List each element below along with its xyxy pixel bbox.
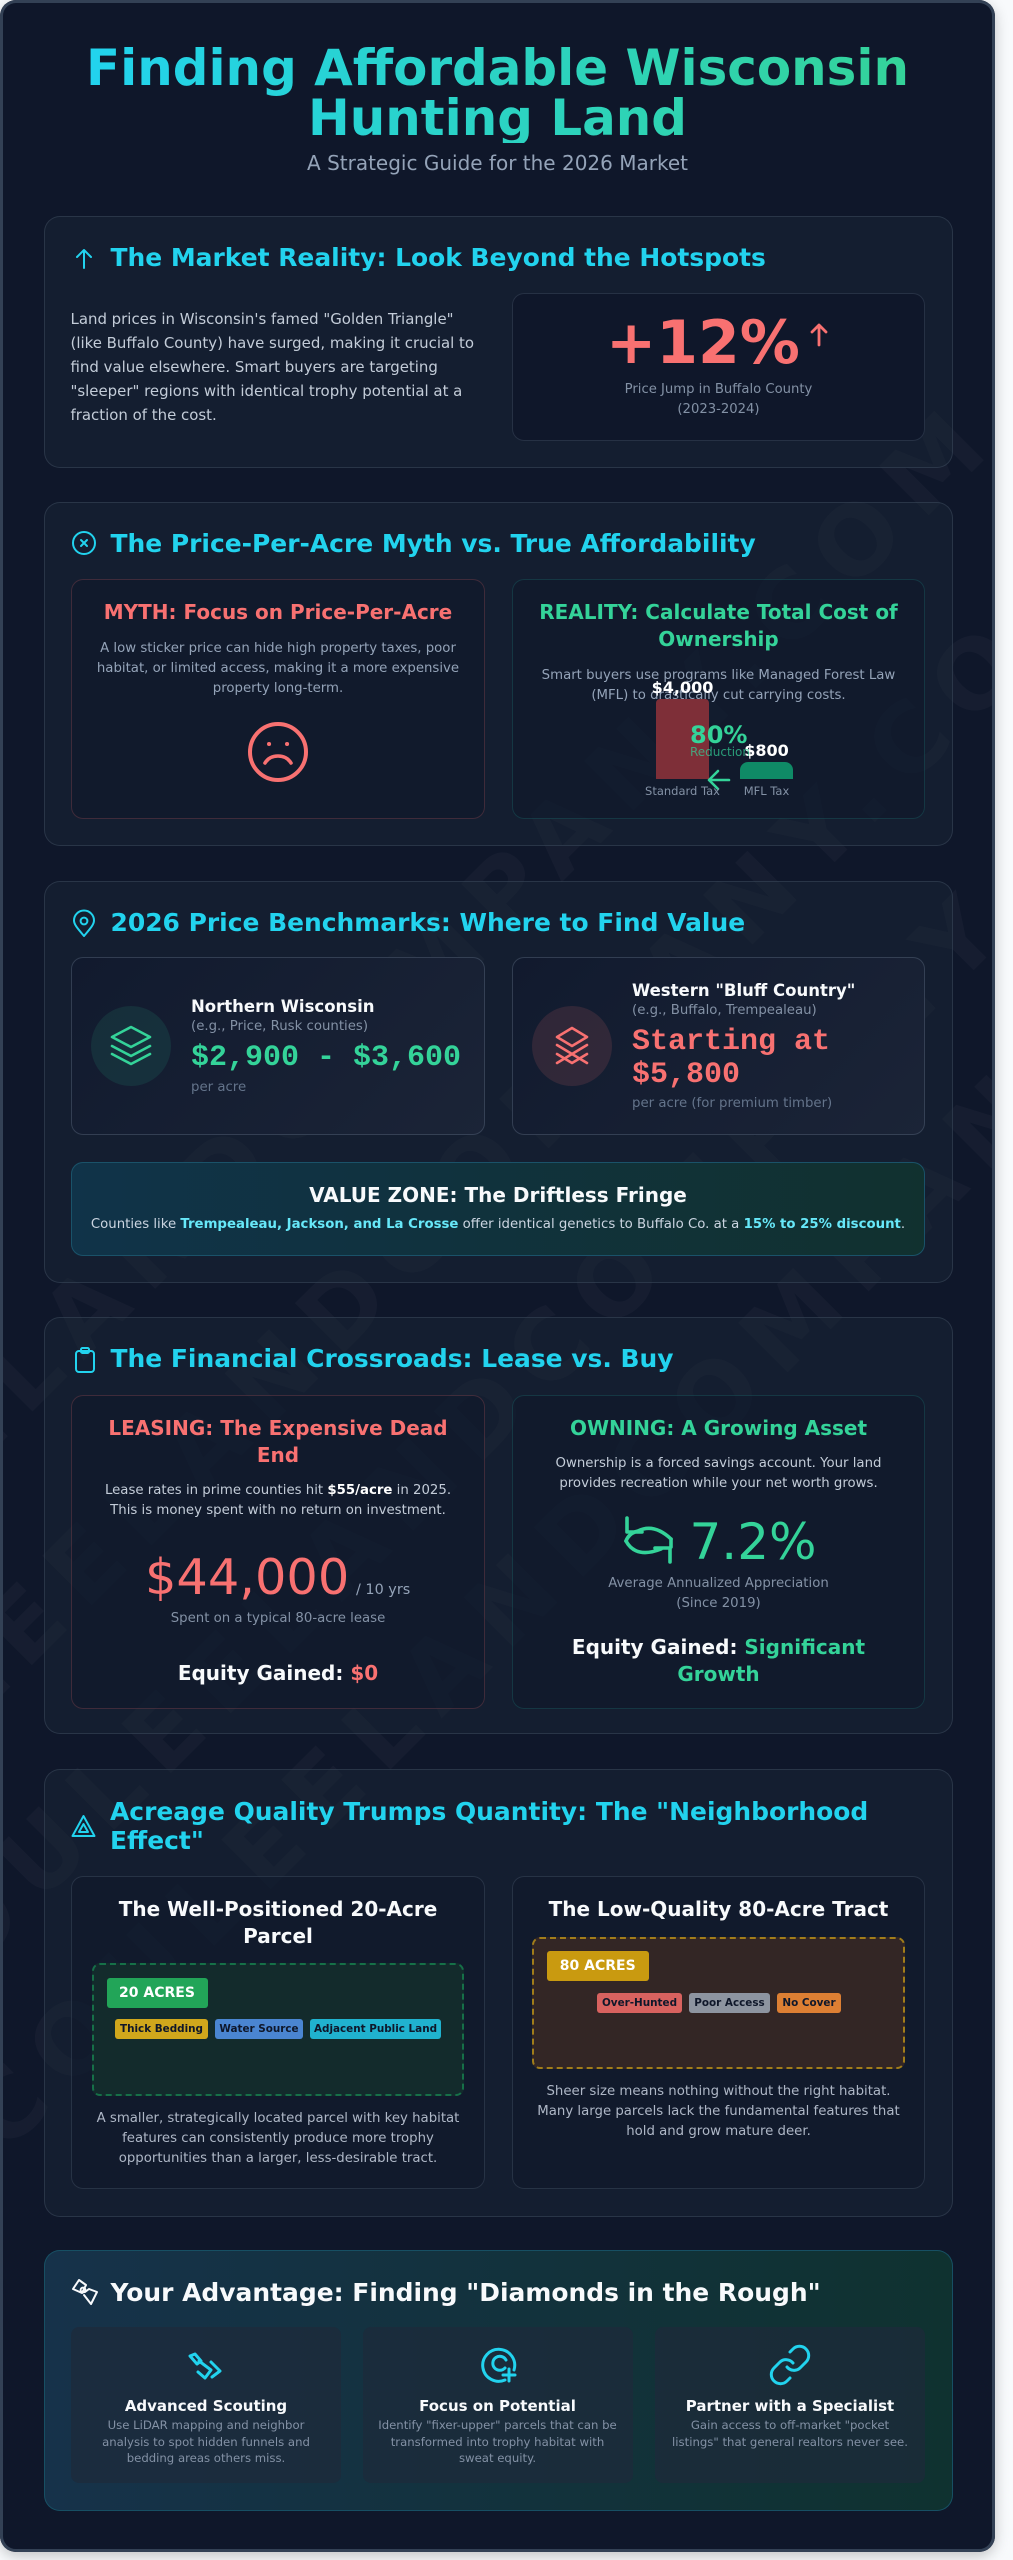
owning text: provides recreation while your net worth grows.	[559, 1476, 878, 1491]
myth text: habitat, or limited access, making it a more expensive	[97, 661, 459, 676]
stat card	[512, 293, 925, 441]
label: 4000: $4,000	[652, 678, 713, 697]
card title: Advanced Scouting	[125, 2397, 287, 2415]
card heading	[118, 1897, 437, 1948]
leasing heading	[108, 1416, 448, 1467]
icon: circle x	[72, 531, 96, 555]
icon: layers	[110, 1026, 152, 1066]
icon: clipboard	[75, 1347, 95, 1373]
lease note: Spent on a typical 80-acre lease	[171, 1611, 385, 1626]
card: owning	[512, 1395, 925, 1709]
card: myth	[71, 579, 485, 819]
card heading: Parcel	[243, 1924, 313, 1948]
appreciation label	[608, 1576, 829, 1611]
lease cost: $44,000	[145, 1548, 349, 1606]
icon: target plus	[481, 2348, 516, 2383]
tract map	[532, 1937, 905, 2069]
card text: Many large parcels lack the fundamental features that	[537, 2104, 900, 2119]
card text	[537, 2084, 900, 2139]
reality heading: Ownership	[658, 627, 779, 651]
card text: analysis to spot hidden funnels and	[102, 2435, 310, 2449]
stat label: (2023-2024)	[677, 402, 760, 417]
card text: Gain access to off-market "pocket	[691, 2418, 889, 2432]
feature tag: Adjacent Public Land	[314, 2023, 437, 2035]
leasing heading: End	[257, 1443, 299, 1467]
owning heading: OWNING: A Growing Asset	[570, 1416, 867, 1440]
parcel map	[92, 1963, 464, 2096]
feature tag: Poor Access	[694, 1997, 765, 2009]
feature tag: Thick Bedding	[120, 2023, 203, 2035]
icon: frown	[248, 722, 308, 782]
body text	[70, 310, 474, 424]
appreciation rate: 7.2%	[690, 1513, 817, 1571]
body text: (like Buffalo County) have surged, making it crucial to	[70, 334, 474, 352]
equity line	[572, 1635, 865, 1686]
equity line: Growth	[677, 1662, 760, 1686]
heading: The Financial Crossroads: Lease vs. Buy	[110, 1344, 674, 1372]
stat label: Price Jump in Buffalo County	[625, 382, 812, 397]
subtitle: A Strategic Guide for the 2026 Market	[307, 151, 688, 175]
reality text: Smart buyers use programs like Managed Forest Law	[542, 668, 895, 683]
card text: Use LiDAR mapping and neighbor	[108, 2418, 304, 2432]
acres tag	[106, 1978, 208, 2008]
equity line: Equity Gained: Significant	[572, 1635, 865, 1659]
acres tag: 20 ACRES	[119, 1985, 195, 2001]
card text: features can consistently produce more trophy	[122, 2131, 434, 2146]
reality text: (MFL) to drastically cut carrying costs.	[591, 688, 846, 703]
card text: sweat equity.	[459, 2451, 536, 2465]
card text: transformed into trophy habitat with	[391, 2435, 604, 2449]
icon: arrow up red	[810, 324, 828, 346]
heading: The Price-Per-Acre Myth vs. True Affordability	[110, 528, 756, 558]
stat value: +12%	[606, 308, 800, 378]
per acre: per acre	[191, 1080, 246, 1095]
heading: Acreage Quality Trumps Quantity: The "Neighborhood	[110, 1796, 868, 1826]
region name: Western "Bluff Country"	[632, 981, 855, 1000]
card title: Partner with a Specialist	[686, 2397, 894, 2415]
feature tag: Water Source	[219, 2023, 299, 2035]
stat label	[625, 382, 812, 417]
icon: layers crossed	[556, 1026, 588, 1064]
card text: bedding areas others miss.	[127, 2451, 285, 2465]
price: $2,900 - $3,600	[191, 1041, 461, 1075]
card text: opportunities than a larger, less-desirable tract.	[119, 2151, 437, 2166]
feature tag: No Cover	[782, 1997, 836, 2009]
leasing heading: LEASING: The Expensive Dead	[108, 1416, 448, 1440]
card text: listings" that general realtors never see.	[672, 2435, 908, 2449]
reality heading	[539, 600, 898, 651]
heading	[110, 1796, 868, 1855]
leasing text: This is money spent with no return on investment.	[110, 1503, 446, 1518]
card: reality	[512, 579, 925, 819]
myth heading: MYTH: Focus on Price-Per-Acre	[104, 600, 452, 624]
panel: market reality	[44, 216, 953, 468]
body text: "sleeper" regions with identical trophy potential at a	[70, 382, 462, 400]
lease duration: / 10 yrs	[356, 1582, 410, 1598]
icon: link	[770, 2344, 810, 2386]
icon: triangle	[72, 1815, 96, 1837]
value zone title: VALUE ZONE: The Driftless Fringe	[309, 1183, 687, 1207]
price: $5,800	[632, 1058, 740, 1092]
equity line: Equity Gained: $0	[178, 1661, 378, 1685]
feature tag	[215, 2019, 303, 2039]
myth text: property long-term.	[213, 681, 343, 696]
card: 20 acre parcel	[71, 1876, 485, 2189]
heading: The Market Reality: Look Beyond the Hotspots	[110, 242, 766, 272]
reality heading: REALITY: Calculate Total Cost of	[539, 600, 898, 624]
card: partner with a specialist	[655, 2327, 925, 2483]
card heading: The Low-Quality 80-Acre Tract	[549, 1897, 888, 1921]
owning text: Ownership is a forced savings account. Your land	[556, 1456, 881, 1471]
card: leasing	[71, 1395, 485, 1709]
body text: Land prices in Wisconsin's famed "Golden Triangle"	[70, 310, 454, 328]
reality text	[542, 668, 895, 703]
card: advanced scouting	[71, 2327, 341, 2483]
myth text	[97, 641, 459, 696]
price	[632, 1025, 830, 1092]
heading: 2026 Price Benchmarks: Where to Find Value	[110, 908, 745, 936]
heading: Your Advantage: Finding "Diamonds in the Rough"	[110, 2278, 821, 2306]
panel: your advantage	[44, 2250, 953, 2511]
icon: refresh arrows	[624, 1516, 673, 1564]
acres tag: 80 ACRES	[560, 1958, 636, 1974]
body text: find value elsewhere. Smart buyers are targeting	[70, 358, 438, 376]
panel: lease vs buy	[44, 1317, 953, 1734]
icon: arrow up	[76, 249, 92, 269]
callout: 80 percent: 80%	[690, 721, 747, 749]
callout: value zone	[71, 1162, 925, 1256]
leasing text	[105, 1483, 451, 1518]
body text: fraction of the cost.	[70, 406, 217, 424]
icon circle green	[91, 1006, 171, 1086]
card text: A smaller, strategically located parcel with key habitat	[97, 2111, 459, 2126]
feature tag	[689, 1993, 770, 2013]
bar: standard tax	[656, 699, 709, 779]
card text: Identify "fixer-upper" parcels that can be	[378, 2418, 617, 2432]
card text	[96, 2111, 460, 2166]
label: standard tax: Standard Tax	[645, 784, 720, 798]
region name: Northern Wisconsin	[191, 997, 374, 1016]
heading: Effect"	[110, 1826, 204, 1855]
value zone text: Counties like Trempealeau, Jackson, and La Crosse offer identical genetics to Buffalo Co. at a 15% to 25% discount.	[91, 1217, 905, 1232]
bar: MFL tax	[740, 762, 793, 779]
bar chart	[645, 678, 793, 798]
label: mfl tax: MFL Tax	[744, 784, 789, 798]
feature tag	[115, 2019, 208, 2039]
card heading: The Well-Positioned 20-Acre	[119, 1897, 437, 1921]
callout: reduction: Reduction	[690, 745, 750, 759]
card title: Focus on Potential	[419, 2397, 576, 2415]
feature tag	[597, 1993, 682, 2013]
leasing text: Lease rates in prime counties hit $55/acre in 2025.	[105, 1483, 451, 1498]
region sub: (e.g., Buffalo, Trempealeau)	[632, 1002, 817, 1018]
acres tag	[547, 1951, 648, 1981]
panel: price benchmarks	[44, 881, 953, 1283]
title	[86, 39, 909, 147]
card text: hold and grow mature deer.	[626, 2124, 811, 2139]
card text	[378, 2418, 617, 2465]
icon: map pin	[73, 910, 95, 937]
appreciation label: Average Annualized Appreciation	[608, 1576, 829, 1591]
per acre: per acre (for premium timber)	[632, 1096, 832, 1111]
arrow	[708, 770, 730, 790]
myth text: A low sticker price can hide high property taxes, poor	[100, 641, 456, 656]
feature tag: Over-Hunted	[602, 1997, 677, 2009]
price: Starting at	[632, 1025, 830, 1059]
icon circle red	[532, 1006, 612, 1086]
panel: acreage quality	[44, 1769, 953, 2217]
title: Finding Affordable Wisconsin	[86, 39, 909, 97]
card: 80 acre tract	[512, 1876, 925, 2189]
owning text	[556, 1456, 881, 1491]
region sub: (e.g., Price, Rusk counties)	[191, 1019, 368, 1034]
title: Hunting Land	[308, 89, 687, 147]
card text	[672, 2418, 908, 2449]
card: bluff country	[512, 957, 925, 1135]
card text: Sheer size means nothing without the right habitat.	[546, 2084, 891, 2099]
card: northern wisconsin	[71, 957, 485, 1135]
panel: price myth	[44, 502, 953, 846]
label: 800: $800	[744, 741, 789, 760]
card text	[102, 2418, 310, 2465]
feature tag	[777, 1993, 841, 2013]
card: focus on potential	[362, 2327, 632, 2483]
feature tag	[310, 2019, 441, 2039]
appreciation label: (Since 2019)	[676, 1596, 761, 1611]
icon: satellite	[188, 2352, 222, 2380]
icon: diamond	[72, 2279, 98, 2305]
